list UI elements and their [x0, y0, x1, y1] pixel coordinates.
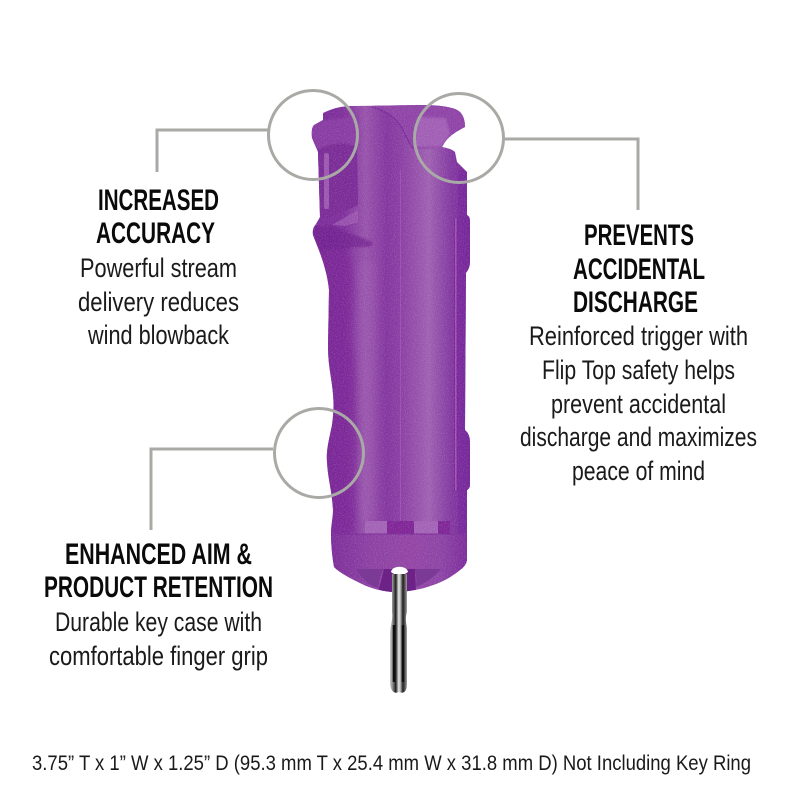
band squares: [365, 521, 450, 534]
flip top: [372, 104, 470, 149]
bottom recess: [356, 569, 441, 588]
body text: Reinforced trigger with: [529, 321, 748, 351]
ring slot highlight: [391, 567, 408, 574]
callout circle: flip top: [414, 94, 638, 210]
heading: ENHANCED AIM &: [65, 538, 252, 571]
key case body: [312, 105, 470, 592]
heading: PRODUCT RETENTION: [44, 571, 273, 604]
body text: wind blowback: [87, 320, 229, 350]
key ring stem through base: [392, 574, 407, 592]
product: purple key case with key ring: [312, 105, 470, 693]
callout circle: accuracy: [157, 90, 358, 180]
heading: INCREASED: [98, 184, 219, 217]
body text: Flip Top safety helps: [542, 355, 735, 385]
body text: [49, 607, 268, 671]
heading: DISCHARGE: [573, 286, 698, 319]
body text: comfortable finger grip: [49, 641, 268, 671]
body text: Durable key case with: [55, 607, 262, 637]
right edge shade: [465, 170, 470, 490]
leader line: [505, 139, 638, 210]
body text: prevent accidental: [551, 389, 726, 419]
text block: prevents accidental discharge: [520, 219, 757, 486]
grip highlight: [358, 262, 376, 520]
heading: PREVENTS: [584, 219, 694, 252]
seam: [400, 170, 401, 521]
body text: [520, 321, 757, 486]
heading: [96, 184, 219, 250]
body text: delivery reduces: [78, 287, 239, 317]
leader line: [157, 130, 268, 172]
trigger top lip: [312, 118, 357, 150]
body text: peace of mind: [572, 456, 705, 486]
icon: key ring: [390, 570, 407, 693]
side channel: [454, 217, 458, 492]
speckle texture: [305, 100, 475, 595]
heading: ACCIDENTAL: [573, 253, 705, 286]
text block: enhanced aim and product retention: [44, 538, 273, 671]
trigger pocket: [316, 144, 358, 218]
heading: ACCURACY: [96, 217, 215, 250]
callout circle: grip: [151, 408, 364, 530]
heading: [44, 538, 273, 604]
case base band: [331, 534, 467, 592]
leader line: [151, 449, 273, 530]
body text: Powerful stream: [80, 253, 237, 283]
left grip shading: [312, 232, 358, 534]
body text: [78, 253, 239, 350]
heading: [573, 219, 705, 319]
diagonal ridge: [312, 227, 372, 248]
flip top edge: [372, 107, 414, 149]
text block: increased accuracy: [78, 184, 239, 350]
